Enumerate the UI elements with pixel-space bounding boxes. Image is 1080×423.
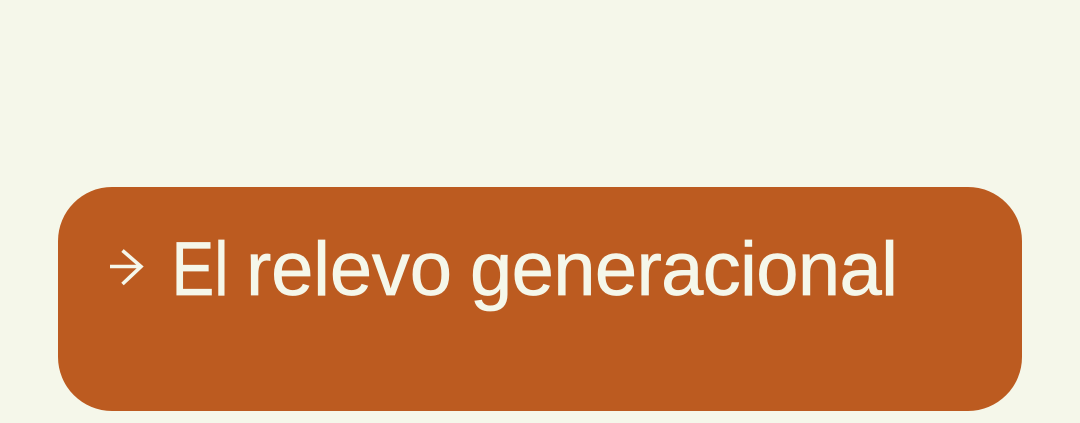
icon: arrow — [110, 250, 141, 284]
panel: heading banner — [58, 187, 1022, 411]
heading — [172, 227, 898, 312]
heading: El — [172, 227, 228, 312]
heading: relevo — [246, 227, 452, 312]
heading: generacional — [470, 227, 898, 312]
